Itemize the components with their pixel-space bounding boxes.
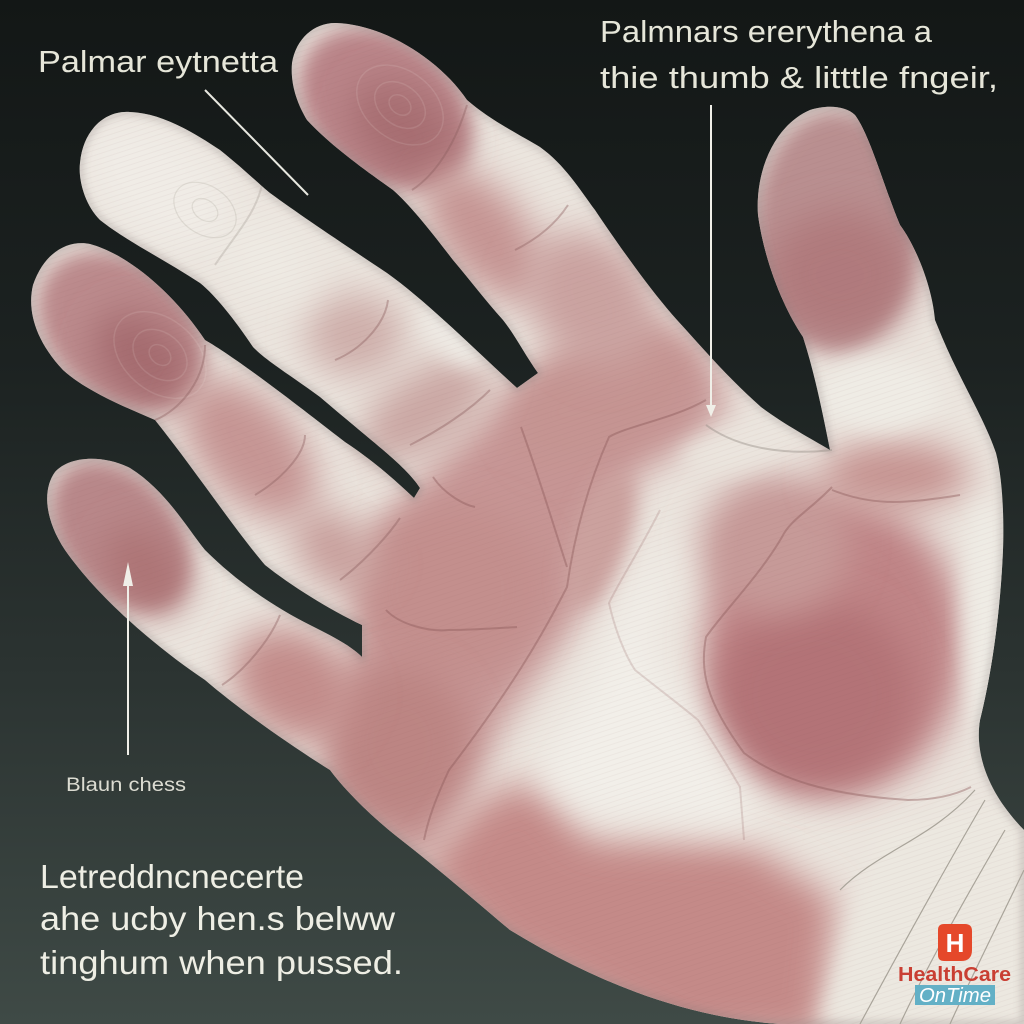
- description text block: [40, 858, 403, 981]
- fingertip ridges: [97, 49, 459, 416]
- label: thumb and little finger: Palmnars ererythena a: [600, 14, 933, 49]
- logo: HealthCare OnTime: [898, 924, 1011, 1007]
- label: palmar eytnetta: Palmar eytnetta: [38, 44, 279, 79]
- thenar redness: [700, 441, 970, 793]
- description text block: Letreddncnecerte: [40, 858, 304, 895]
- label: thumb and little finger: thie thumb & litttle fngeir,: [600, 60, 998, 95]
- finger joint creases: [155, 105, 568, 685]
- label: palmar eytnetta: [38, 44, 308, 195]
- finger redness: [6, 0, 917, 767]
- palm redness: [330, 305, 835, 1024]
- arrow: little finger pointer: [123, 562, 133, 755]
- pointer line: palmar eytnetta: [205, 90, 308, 195]
- logo tag: OnTime: [919, 985, 991, 1007]
- palm creases: [386, 400, 971, 840]
- description text block: tinghum when pussed.: [40, 944, 403, 981]
- description text block: ahe ucby hen.s belww: [40, 900, 395, 937]
- logo icon: H: [946, 928, 964, 958]
- label: thumb and little finger: [600, 14, 998, 95]
- logo wordmark: HealthCare: [898, 964, 1011, 986]
- label: blaun chess: Blaun chess: [66, 775, 186, 796]
- wrist creases: [840, 790, 1024, 1024]
- arrow: palm pointer: [706, 105, 716, 417]
